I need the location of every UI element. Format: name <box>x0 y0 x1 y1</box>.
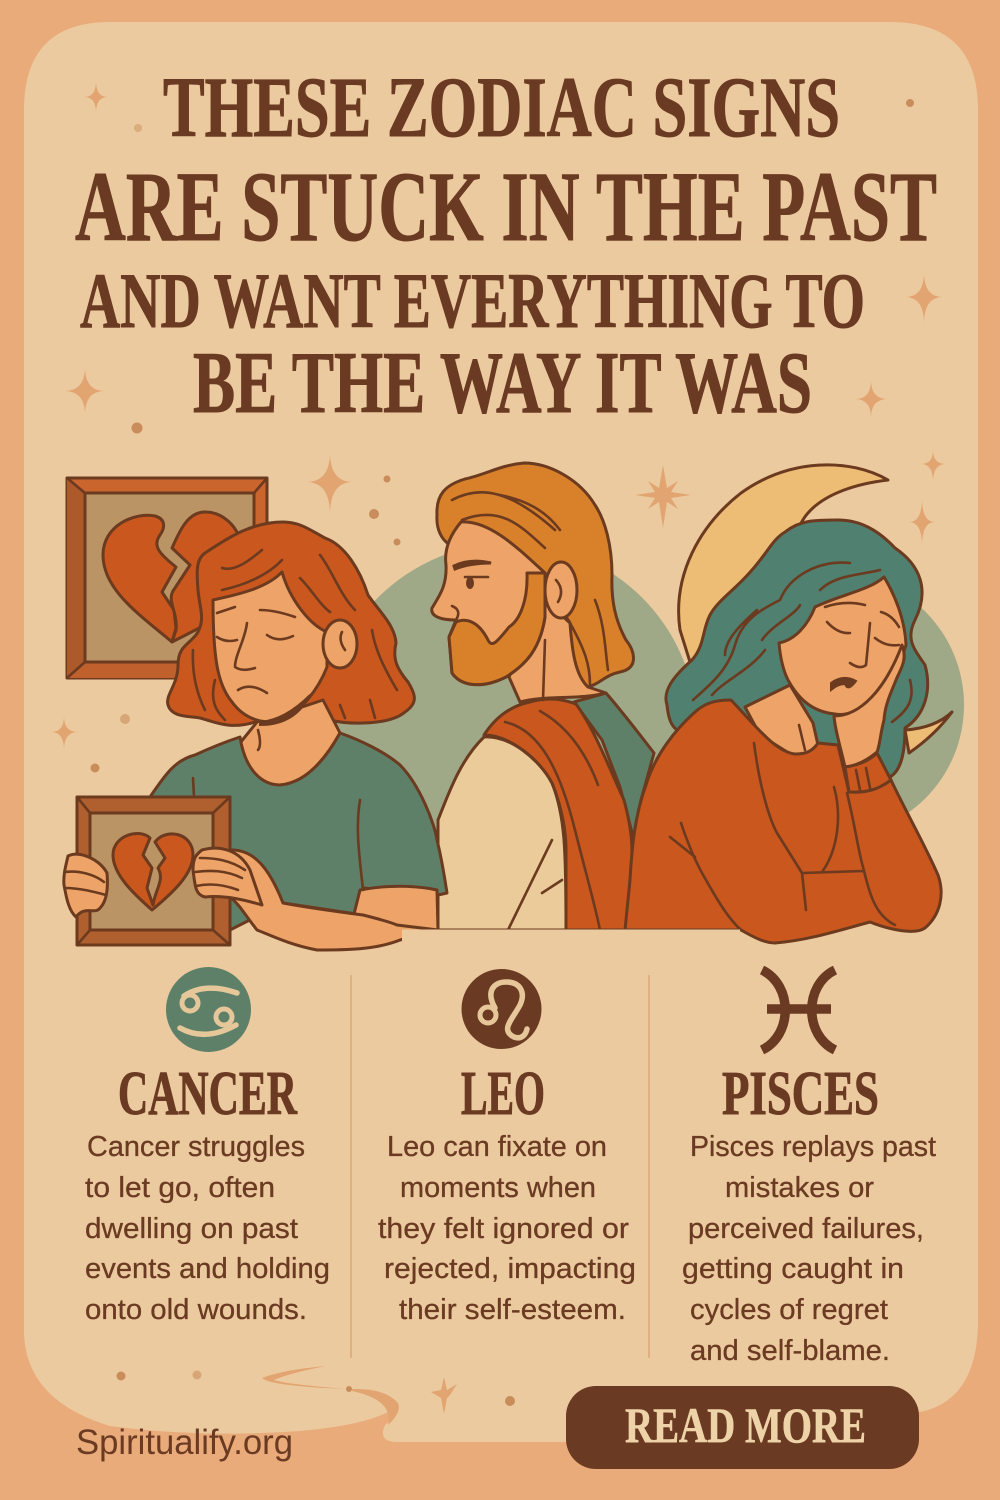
text: Leo description: their self-esteem. <box>399 1294 626 1326</box>
text: Pisces description <box>682 1131 936 1367</box>
illustration: three sad figures <box>64 463 964 950</box>
text: Pisces description: cycles of regret <box>690 1294 888 1326</box>
title <box>75 59 937 432</box>
text: Cancer description: to let go, often <box>85 1172 275 1204</box>
text: Cancer description: events and holding <box>85 1253 330 1285</box>
column: Leo <box>378 969 636 1326</box>
right hand holding frame <box>193 848 262 905</box>
text: Leo description <box>378 1131 636 1326</box>
heading: Pisces: PISCES <box>722 1060 879 1128</box>
green t-shirt <box>150 733 447 930</box>
man ear <box>545 562 577 618</box>
text: Pisces description: perceived failures, <box>688 1213 924 1245</box>
man orange drape <box>484 699 632 930</box>
text: Pisces description: Pisces replays past <box>690 1131 936 1163</box>
figure: woman with red hair (Cancer) <box>150 522 447 950</box>
man hair <box>437 463 634 687</box>
woman sweater <box>625 700 941 943</box>
arm <box>350 886 438 930</box>
icon: Cancer glyph <box>166 967 251 1052</box>
text: Cancer description: dwelling on past <box>85 1213 298 1245</box>
column: Pisces <box>682 970 936 1367</box>
man beard <box>449 573 545 685</box>
decorative stars and dots <box>51 81 946 1414</box>
left hand holding frame <box>64 854 107 917</box>
ear <box>323 620 357 668</box>
button: read more: READ MORE <box>625 1397 866 1453</box>
column dividers <box>351 975 649 1358</box>
icon: Leo glyph <box>462 969 542 1049</box>
text: Leo description: they felt ignored or <box>378 1213 629 1245</box>
text: Cancer description: onto old wounds. <box>85 1294 307 1326</box>
man neck <box>509 600 606 702</box>
sage background circles <box>323 543 964 917</box>
text: Cancer description: Cancer struggles <box>87 1131 305 1163</box>
woman sweater cuff <box>845 753 891 792</box>
face <box>213 572 327 722</box>
website credit: Spiritualify.org <box>76 1423 293 1462</box>
neck <box>240 700 340 785</box>
heading: Cancer: CANCER <box>118 1060 298 1128</box>
column: Cancer <box>85 967 330 1326</box>
icon: Pisces glyph <box>762 970 835 1050</box>
figure: man with beard (Leo) <box>432 463 654 930</box>
forearm <box>230 850 438 950</box>
woman hand on cheek <box>834 645 904 767</box>
figure: woman with teal hair (Pisces) <box>625 520 941 943</box>
text: Cancer description <box>85 1131 330 1326</box>
text: Leo description: rejected, impacting <box>384 1253 636 1285</box>
wall frame with broken heart <box>67 478 267 678</box>
woman face <box>779 577 906 714</box>
crescent moon <box>679 465 952 753</box>
text: Leo description: moments when <box>400 1172 596 1204</box>
held picture frame with broken heart <box>77 797 230 945</box>
button: read more <box>566 1386 919 1469</box>
man torso and cream sleeve <box>438 737 566 930</box>
swirl swash near bottom <box>262 1366 399 1425</box>
text: Leo description: Leo can fixate on <box>387 1131 607 1163</box>
man face <box>432 522 545 685</box>
teal hair <box>666 520 928 790</box>
woman neck <box>745 685 818 760</box>
text: Pisces description: getting caught in <box>682 1253 904 1285</box>
heading: Leo: LEO <box>461 1060 545 1128</box>
text: Pisces description: and self-blame. <box>690 1335 890 1367</box>
man green shirt <box>574 693 654 840</box>
red hair <box>168 522 414 725</box>
text: Pisces description: mistakes or <box>725 1172 874 1204</box>
